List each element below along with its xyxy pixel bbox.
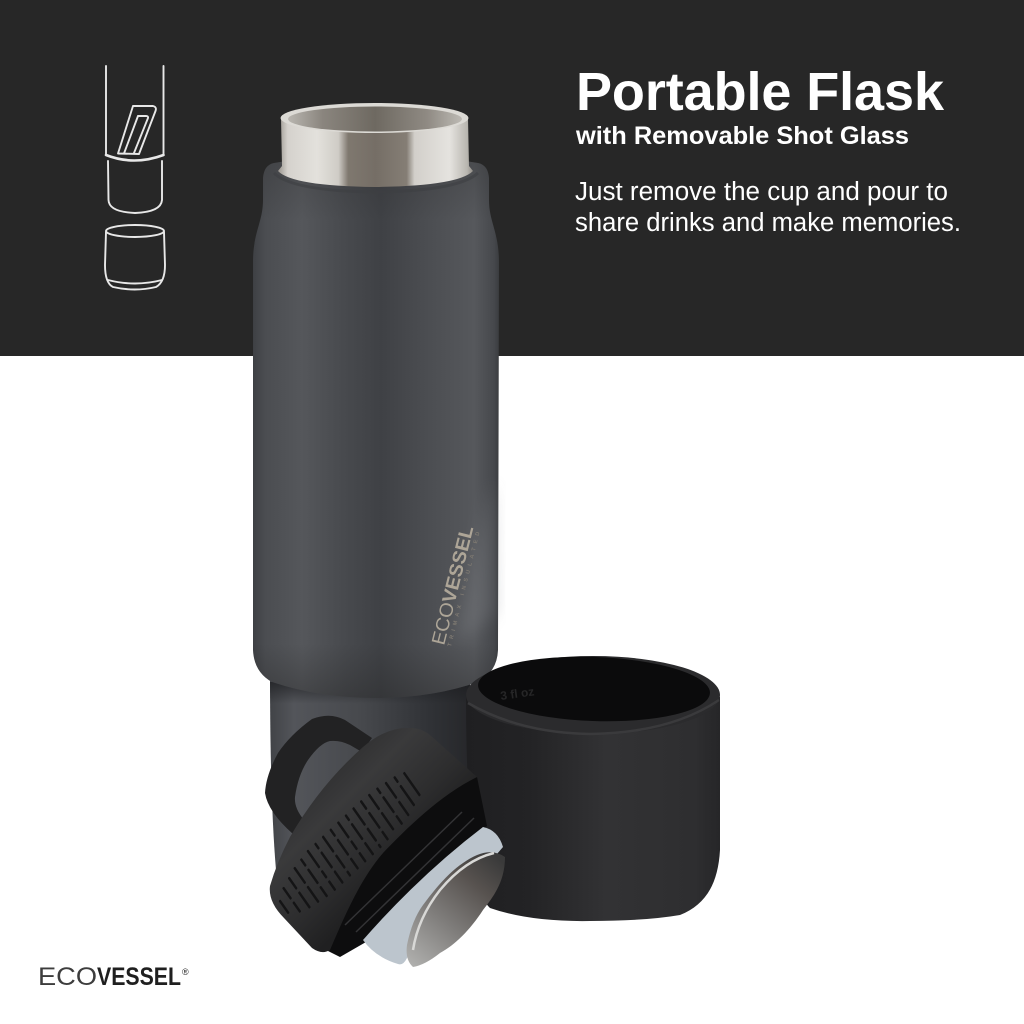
main body: [253, 155, 499, 698]
steel collar: [278, 103, 473, 187]
steel dome: [407, 852, 505, 967]
lid band: [270, 728, 477, 952]
silicone ring: [363, 827, 503, 964]
description text: [575, 178, 961, 237]
rim highlight: [468, 700, 719, 734]
description text: share drinks and make memories.: [575, 209, 961, 237]
neck gloss: [345, 812, 474, 932]
brand logo: VESSEL: [97, 963, 181, 991]
brand logo: ECO: [38, 963, 97, 991]
lower section shadow: [270, 682, 470, 862]
body reflection: [456, 480, 494, 640]
header band: [0, 0, 1024, 356]
cup body: [466, 696, 720, 921]
engraved logo: ECOVESSEL: [428, 523, 478, 647]
engraved logo: TRIMAX INSULATED: [447, 531, 482, 647]
description text: Just remove the cup and pour to: [575, 178, 948, 206]
icon: flask with removable cup: [105, 66, 165, 290]
subtitle: with Removable Shot Glass: [575, 122, 909, 150]
lower bottle section: [270, 670, 470, 870]
collar base shadow: [274, 173, 478, 192]
title: Portable Flask: [576, 62, 945, 122]
brand logo: [38, 963, 189, 991]
threaded neck: [326, 777, 487, 957]
body shading: [253, 155, 499, 698]
cup rim: [466, 656, 720, 734]
flask lid: [265, 716, 505, 967]
lid handle: [265, 716, 372, 834]
measure marking: 3 fl oz: [499, 684, 535, 703]
shot glass cup: [466, 653, 720, 921]
grip pattern: [270, 766, 426, 925]
cup interior: [477, 653, 711, 725]
flask bottle: [253, 103, 499, 870]
steel highlight: [413, 853, 494, 950]
brand logo: ®: [182, 967, 189, 977]
